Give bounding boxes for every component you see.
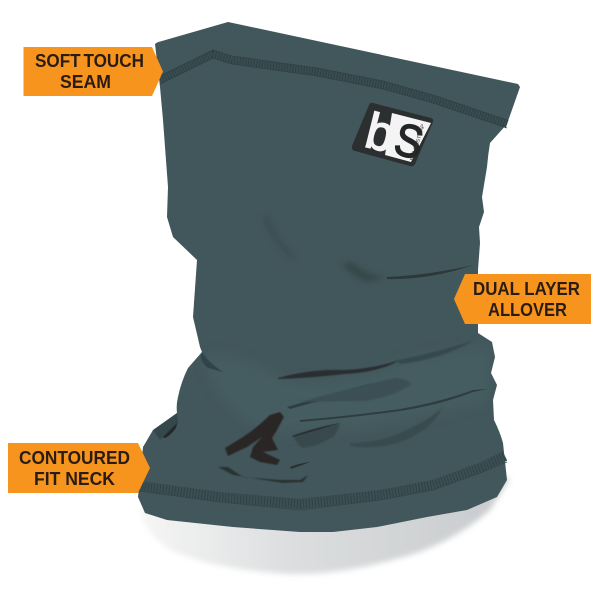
product shadow [140,478,510,574]
top soft touch seam [160,50,507,128]
bottom contoured seam [139,456,507,510]
brand badge: S [390,112,428,169]
brand badge: BLACKSTRAP [409,123,427,162]
label: soft touch seam: SEAM [60,72,111,92]
gaiter silhouette [138,22,520,532]
brand badge [352,102,433,169]
dark inner fold [225,412,284,465]
label: dual layer allover: ALLOVER [488,300,567,320]
brand badge: b [360,102,400,163]
label: contoured fit neck: FIT NECK [34,469,115,489]
label: dual layer allover: DUAL LAYER [473,279,580,299]
label: soft touch seam [24,47,163,96]
label: soft touch seam: SOFT TOUCH [35,51,144,71]
neck gaiter product [138,22,520,532]
fabric folds and shading [153,262,492,484]
label: contoured fit neck: CONTOURED [19,448,130,468]
label: contoured fit neck [8,443,150,493]
label: dual layer allover [454,274,591,324]
